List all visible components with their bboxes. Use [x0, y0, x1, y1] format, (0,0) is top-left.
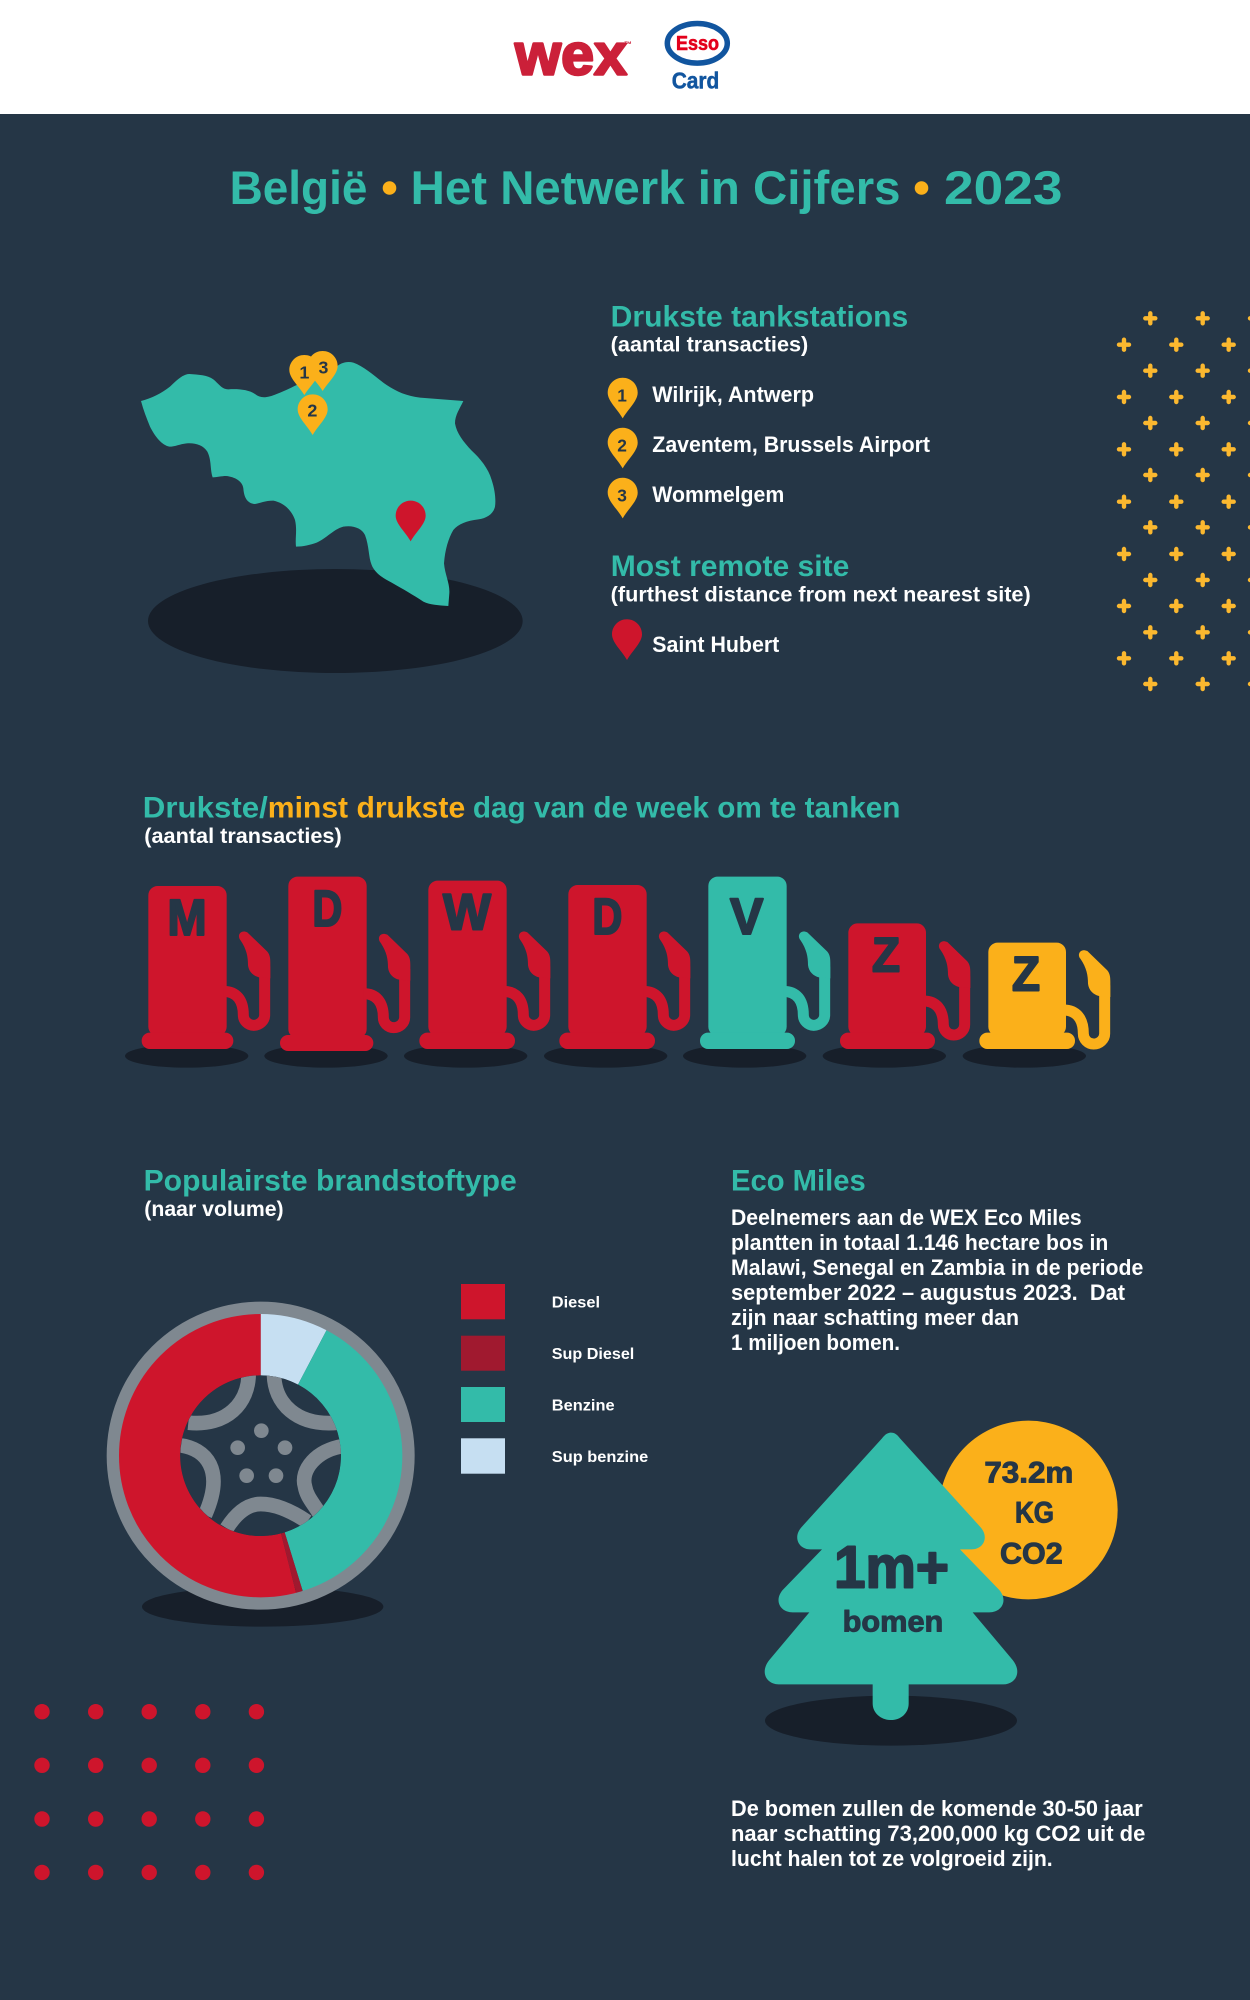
station 1: Wilrijk, Antwerp — [652, 382, 814, 407]
pin 3 on map — [308, 351, 338, 391]
logo: WEX: wex — [514, 22, 627, 88]
station 3: Wommelgem — [652, 482, 784, 507]
title — [230, 161, 1063, 214]
CO2 badge: 73.2m — [984, 1457, 1073, 1490]
title: 2023 — [944, 161, 1062, 214]
legend pin: red — [612, 619, 642, 660]
tree: 1m+ — [834, 1533, 949, 1600]
pump: Wednesday — [404, 881, 550, 1068]
title: Het Netwerk in Cijfers — [411, 161, 900, 214]
heading: busiest day of the week: dag van de week om te tanken — [473, 791, 900, 824]
heading: most remote site: Most remote site — [611, 550, 849, 583]
wheel hub — [178, 1373, 343, 1536]
pump: Friday (busiest) — [683, 877, 830, 1068]
subheading: by volume: (naar volume) — [144, 1198, 284, 1221]
tree shadow — [765, 1696, 1017, 1746]
header bar with logos — [0, 0, 1250, 114]
legend: Sup Diesel: Sup Diesel — [552, 1346, 634, 1363]
pin 2 on map: 2 — [307, 401, 317, 421]
logo: Esso Card: Card — [672, 67, 719, 93]
chart legend — [461, 1284, 648, 1474]
text block: CO2 note: lucht halen tot ze volgroeid zijn. — [731, 1846, 1053, 1871]
legend: Diesel — [461, 1284, 600, 1319]
map of Belgium with pins — [141, 351, 523, 673]
logo: Esso Card: Esso — [676, 33, 719, 55]
legend: Sup benzine: Sup benzine — [552, 1449, 648, 1466]
legend pin 1: 1 — [617, 386, 627, 406]
pin 1 on map — [289, 355, 319, 395]
subheading: transactions: (aantal transacties) — [144, 825, 342, 848]
pump: Tuesday — [264, 877, 410, 1068]
text block: CO2 note — [731, 1796, 1145, 1871]
pin 2 on map — [298, 394, 328, 435]
pump: Saturday: Z — [872, 929, 900, 983]
pin 3 on map: 3 — [318, 357, 328, 377]
pump: Monday: M — [167, 889, 207, 946]
title: België — [230, 161, 367, 214]
text block: Eco Miles description: september 2022 – augustus 2023. Dat — [731, 1280, 1126, 1305]
legend pin 1 — [608, 378, 638, 418]
heading: Eco Miles: Eco Miles — [731, 1165, 866, 1198]
CO2 badge: CO2 — [1000, 1537, 1063, 1570]
panel: busiest stations — [608, 301, 931, 518]
station 2: Zaventem, Brussels Airport — [652, 432, 931, 457]
tyre rim — [113, 1308, 408, 1603]
map outline — [141, 362, 495, 606]
text block: Eco Miles description: Deelnemers aan de WEX Eco Miles — [731, 1205, 1082, 1230]
text block: Eco Miles description: Malawi, Senegal en Zambia in de periode — [731, 1255, 1143, 1280]
slice: Diesel — [117, 1313, 296, 1598]
legend: Sup Diesel — [461, 1336, 634, 1371]
subheading: (furthest distance from next nearest site) — [611, 584, 1031, 607]
pump: Tuesday: D — [312, 880, 342, 937]
subheading: (aantal transacties) — [611, 334, 808, 357]
legend pin 2 — [608, 428, 638, 468]
slice: Benzine — [285, 1329, 403, 1592]
red pin on map — [396, 501, 426, 541]
CO2 badge — [939, 1421, 1118, 1599]
legend: Benzine: Benzine — [552, 1398, 615, 1415]
text block: CO2 note: naar schatting 73,200,000 kg CO2 uit de — [731, 1821, 1145, 1846]
pump: Sunday (quietest) — [963, 943, 1110, 1068]
remote site name: Saint Hubert — [652, 632, 780, 657]
legend: Diesel: Diesel — [552, 1295, 600, 1312]
legend: Sup benzine — [461, 1438, 648, 1474]
map shadow — [148, 569, 523, 673]
text block: CO2 note: De bomen zullen de komende 30-50 jaar — [731, 1796, 1143, 1821]
pump: Thursday — [544, 885, 690, 1068]
heading: busiest day of the week — [143, 791, 900, 824]
pump: Thursday: D — [592, 888, 622, 945]
pump: Wednesday: W — [443, 883, 491, 940]
legend pin 3 — [608, 478, 638, 518]
tree — [765, 1433, 1017, 1720]
pump: Monday — [125, 886, 270, 1068]
legend pin 3: 3 — [617, 486, 627, 506]
slice: Sup benzine — [261, 1313, 327, 1385]
heading: popular fuel type: Populairste brandstoftype — [144, 1165, 517, 1198]
pump: Sunday (quietest): Z — [1012, 948, 1040, 1002]
logo: Esso Card — [667, 24, 727, 93]
logo: WEX: ™ — [624, 40, 632, 49]
pump: Friday (busiest): V — [730, 888, 764, 945]
pump: Saturday — [823, 923, 970, 1068]
text block: Eco Miles description: 1 miljoen bomen. — [731, 1330, 900, 1355]
tree graphic with CO2 badge — [765, 1421, 1118, 1746]
heading: busiest day of the week: Drukste/ — [143, 791, 268, 824]
text block: Eco Miles description — [731, 1205, 1143, 1355]
tree: bomen — [843, 1606, 943, 1639]
text block: Eco Miles description: zijn naar schatting meer dan — [731, 1305, 1019, 1330]
legend pin 2: 2 — [617, 436, 627, 456]
panel: most remote site — [611, 550, 1031, 660]
slice: Sup Diesel — [281, 1532, 303, 1594]
pin 1 on map: 1 — [299, 362, 309, 382]
text block: Eco Miles description: plantten in totaal 1.146 hectare bos in — [731, 1230, 1108, 1255]
heading: busiest day of the week: minst drukste — [268, 791, 465, 824]
CO2 badge: KG — [1015, 1497, 1054, 1530]
heading: busiest stations: Drukste tankstations — [611, 301, 908, 334]
chart shadow — [142, 1587, 383, 1627]
donut chart: tyre — [113, 1308, 408, 1627]
legend: Benzine — [461, 1387, 615, 1422]
